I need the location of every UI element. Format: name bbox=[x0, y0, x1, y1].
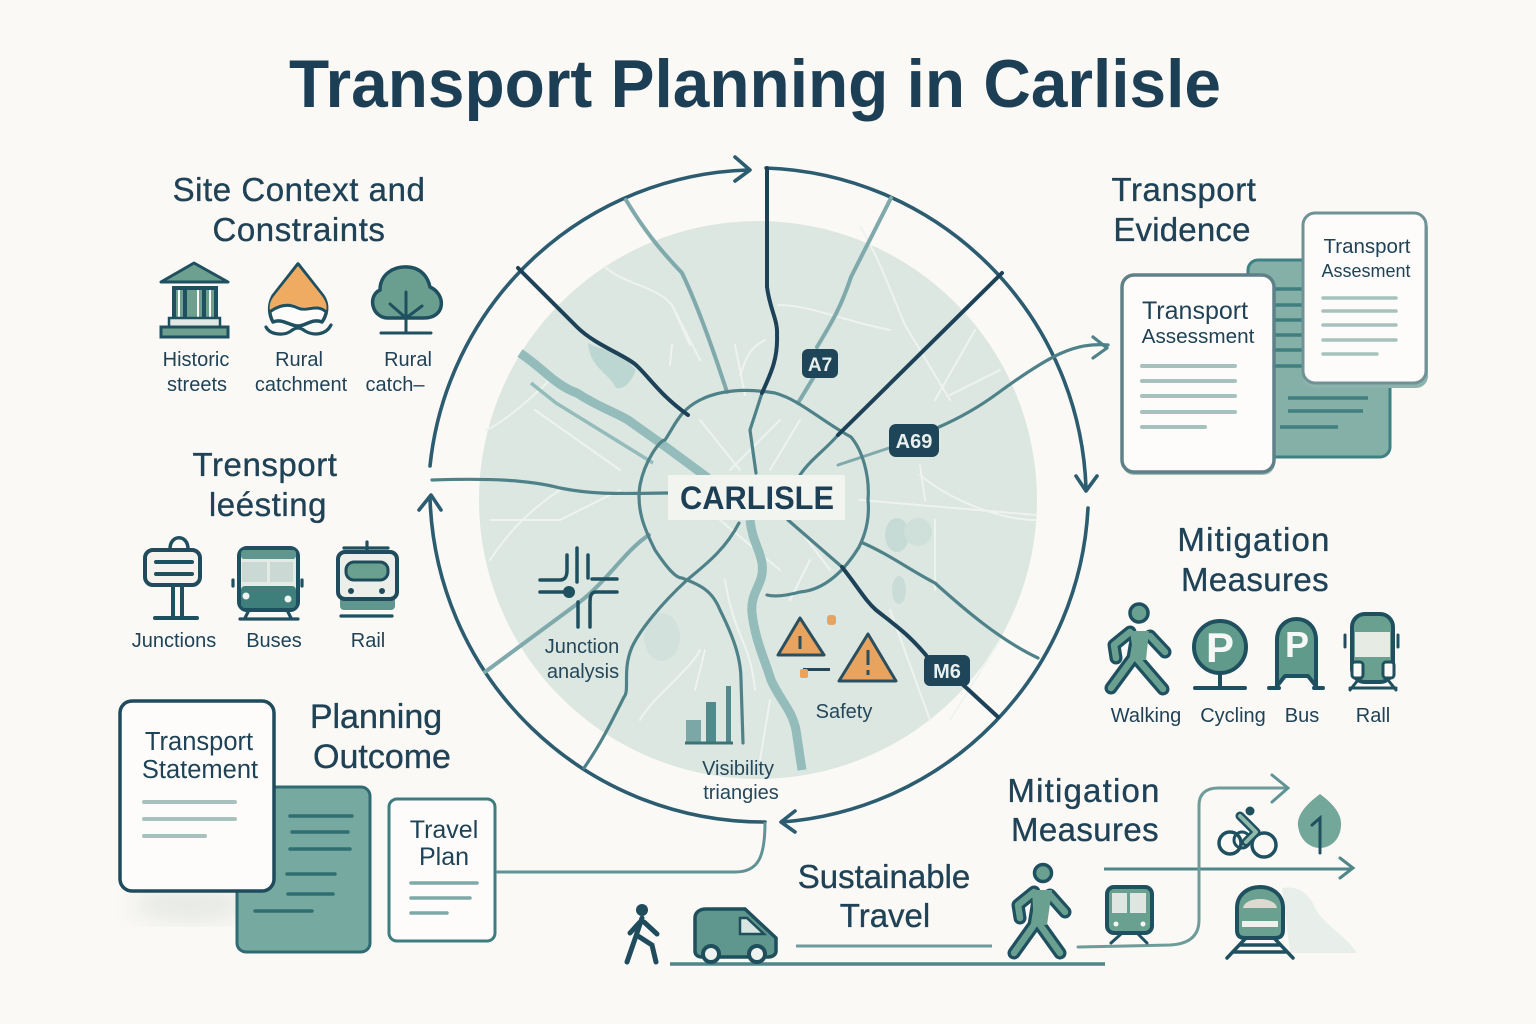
icon: junction sign bbox=[132, 538, 216, 652]
heading: transport evidence bbox=[1112, 171, 1256, 248]
heading: transport testing bbox=[193, 446, 337, 523]
outer ring with arrows bbox=[419, 157, 1097, 832]
heading: site context: Site Context and bbox=[173, 171, 425, 208]
heading: sustainable travel: Travel bbox=[840, 897, 930, 934]
road badge: A69 bbox=[889, 424, 939, 457]
icon: cyclist bbox=[1219, 806, 1276, 857]
icon: safety warnings bbox=[778, 615, 896, 723]
icon: bus parking sign: P bbox=[1285, 624, 1309, 665]
heading: site context bbox=[173, 171, 425, 248]
icon: rail station bbox=[1345, 614, 1398, 727]
heading: sustainable travel bbox=[798, 858, 970, 934]
panel: travel plan bbox=[389, 799, 495, 941]
icon: tram bbox=[1107, 887, 1152, 943]
heading: mitigation measures lower bbox=[1007, 772, 1161, 848]
icon: visibility triangles chart: Visibility bbox=[702, 758, 774, 780]
icon: historic streets: Historic bbox=[163, 349, 229, 371]
icon: junction analysis: analysis bbox=[547, 661, 619, 683]
heading: transport testing: leésting bbox=[209, 486, 327, 523]
heading: sustainable travel: Sustainable bbox=[798, 858, 970, 895]
icon: van bbox=[695, 909, 776, 962]
heading: site context: Constraints bbox=[213, 211, 385, 248]
icon: rural catchment drop: catchment bbox=[255, 374, 348, 396]
heading: mitigation measures lower: Measures bbox=[1011, 811, 1159, 848]
icon: rail station: Rall bbox=[1356, 705, 1390, 727]
heading: planning outcome: Planning bbox=[310, 698, 442, 736]
panel: transport evidence documents: Transport bbox=[1142, 297, 1248, 325]
icon: bus parking sign: Bus bbox=[1285, 705, 1319, 727]
sector lines and roads bbox=[432, 168, 1108, 768]
road badge: A69: A69 bbox=[896, 431, 932, 453]
icon: tree: catch– bbox=[366, 374, 425, 396]
sustainable travel route lines and arrows bbox=[670, 775, 1353, 964]
icon: cycling parking sign bbox=[1194, 621, 1266, 727]
icon: rural catchment drop bbox=[255, 264, 348, 396]
panel: transport evidence documents: Transport bbox=[1324, 235, 1411, 258]
heading: transport testing: Trensport bbox=[193, 446, 337, 483]
icon: leaf bbox=[1298, 794, 1341, 853]
icon: walker large bbox=[1014, 864, 1065, 953]
panel: transport evidence documents: Assesment bbox=[1321, 261, 1411, 281]
icon: rail: Rail bbox=[351, 630, 385, 652]
arrow into evidence bbox=[1093, 337, 1107, 358]
icon: cycling parking sign: Cycling bbox=[1200, 705, 1266, 727]
icon: historic streets: streets bbox=[167, 374, 227, 396]
icon: tree bbox=[366, 267, 441, 396]
heading: mitigation measures lower: Mitigation bbox=[1007, 772, 1161, 809]
icon: rail bbox=[338, 542, 397, 652]
icon: historic streets bbox=[161, 263, 229, 396]
icon: junction analysis bbox=[540, 548, 619, 683]
icon: walking: Walking bbox=[1111, 705, 1181, 727]
icon: visibility triangles chart bbox=[685, 686, 779, 804]
centre label: CARLISLE bbox=[680, 480, 834, 516]
icon: junction analysis: Junction bbox=[545, 636, 619, 658]
panel: transport statement documents: Transport bbox=[145, 728, 253, 756]
heading: mitigation measures upper: Mitigation bbox=[1177, 521, 1331, 558]
icon: safety warnings: Safety bbox=[816, 701, 872, 723]
title: Transport Planning in Carlisle bbox=[289, 46, 1221, 122]
panel: transport statement documents: Statement bbox=[142, 756, 258, 784]
icon: walking bbox=[1111, 604, 1181, 727]
panel: travel plan: Plan bbox=[419, 843, 469, 871]
heading: transport evidence: Transport bbox=[1112, 171, 1256, 208]
heading: transport evidence: Evidence bbox=[1113, 211, 1251, 248]
icon: train bbox=[1227, 887, 1357, 958]
icon: bus bbox=[233, 548, 302, 652]
icon: visibility triangles chart: triangies bbox=[703, 782, 779, 804]
panel: travel plan: Travel bbox=[410, 816, 478, 844]
heading: planning outcome: Outcome bbox=[313, 738, 451, 776]
road badge: M6 bbox=[924, 655, 970, 686]
icon: cycling parking sign: P bbox=[1206, 624, 1234, 671]
icon: bus: Buses bbox=[246, 630, 302, 652]
panel: transport statement documents bbox=[120, 701, 370, 952]
rivers bbox=[520, 353, 802, 770]
heading: mitigation measures upper bbox=[1177, 521, 1331, 598]
heading: planning outcome bbox=[310, 698, 451, 776]
road badge: A7 bbox=[802, 349, 838, 378]
panel: transport evidence documents bbox=[1122, 213, 1428, 475]
icon: tree: Rural bbox=[384, 349, 432, 371]
heading: mitigation measures upper: Measures bbox=[1181, 561, 1329, 598]
icon: rural catchment drop: Rural bbox=[275, 349, 323, 371]
road badge: M6: M6 bbox=[933, 661, 961, 683]
panel: transport evidence documents: Assessment bbox=[1142, 325, 1255, 348]
icon: junction sign: Junctions bbox=[132, 630, 216, 652]
central map disc bbox=[479, 221, 1037, 779]
icon: pedestrian small bbox=[627, 904, 657, 962]
icon: bus parking sign bbox=[1269, 619, 1323, 727]
road badge: A7: A7 bbox=[808, 355, 832, 376]
connector from travel plan to ring bbox=[496, 822, 765, 872]
